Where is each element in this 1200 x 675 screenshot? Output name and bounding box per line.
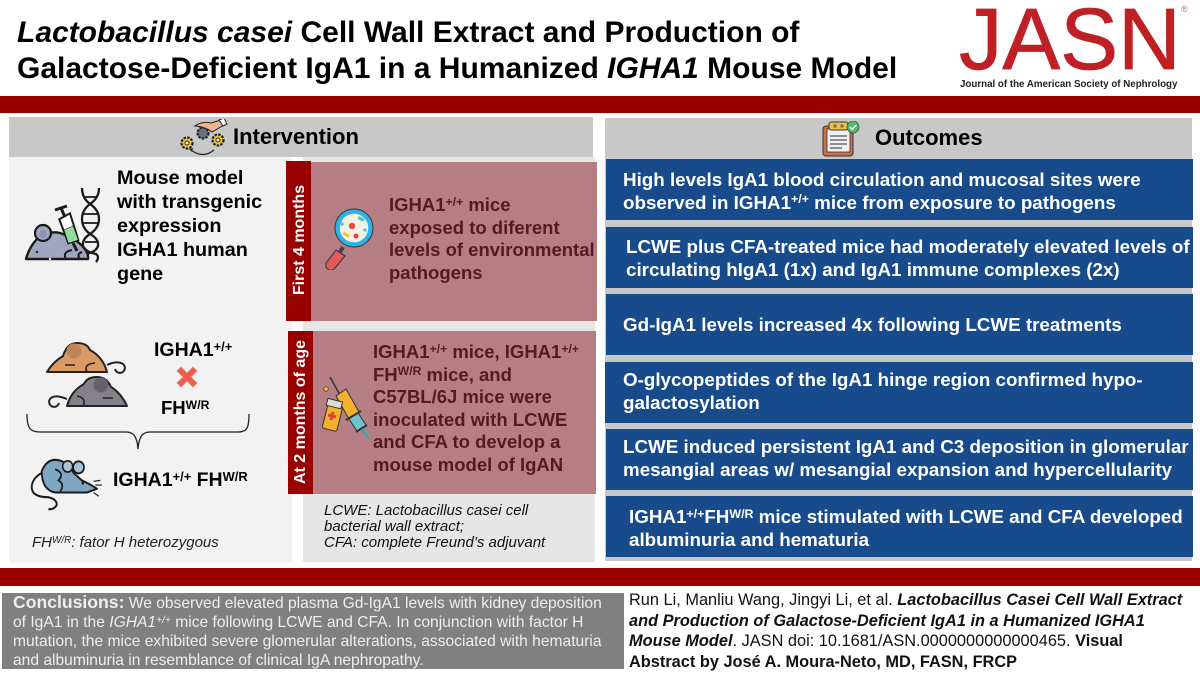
title [17,16,897,85]
text: inoculation: inoculated with LCWE [373,409,567,430]
text: mouse model: with transgenic [117,191,262,213]
title: Galactose-Deficient IgA1 in a Humanized IGHA1 Mouse Model [17,52,897,85]
conclusions text [13,592,602,669]
icon: magnifier with microbes [325,208,374,270]
pink body [288,331,596,494]
text: inoculation: and CFA to develop a [373,431,560,452]
outcome 4: O-glycopeptides of the IgA1 hinge region confirmed hypo- [623,369,1143,390]
text: cross result: IGHA1+/+ FHW/R [113,469,248,491]
side label [286,161,311,321]
icon: red cross [176,366,198,388]
conclusions text: Conclusions: We observed elevated plasma Gd-IgA1 levels with kidney deposition [13,592,602,612]
outcome 3 [606,294,1193,355]
text: exposure: exposed to diferent [389,217,560,238]
text: FH footnote: FHW/R: fator H heterozygous [32,534,219,551]
intervention heading: Intervention [233,124,359,149]
title: Lactobacillus casei Cell Wall Extract and Production of [17,16,799,49]
outcome 4: galactosylation [623,392,760,413]
brace [26,414,250,449]
at 2 months label: At 2 months of age [292,340,309,484]
citation: Mouse Model. JASN doi: 10.1681/ASN.0000000000000465. Visual [629,632,1123,650]
top red band [0,96,1200,113]
icon: syringe and vial [322,376,370,439]
bottom red band [0,568,1200,586]
text: exposure: levels of environmental [389,239,595,260]
icon: clipboard with check [822,121,860,156]
outcomes background [605,118,1192,561]
panel: outcomes [605,118,1192,561]
text: FH label: FHW/R [161,397,209,418]
JASN logo: ® [1181,4,1188,14]
panel: at 2 months of age [288,331,596,494]
text: abbreviations note [324,502,546,551]
text: mouse model [117,167,262,285]
text: exposure: pathogens [389,262,483,283]
icon: blue mouse [30,458,102,510]
text: mouse model: IGHA1 human [117,239,248,261]
text: inoculation: C57BL/6J mice were [373,386,552,407]
text: exposure: IGHA1+/+ mice [389,194,511,215]
text: inoculation [373,341,579,475]
pink body [311,162,597,321]
conclusions text: mutation, the mice exhibited severe glomerular alterations, associated with hematuria [13,633,602,650]
text: inoculation: mouse model of IgAN [373,454,563,475]
intervention background [9,157,292,563]
text: mouse model: gene [117,263,163,285]
outcome 5 [606,429,1193,490]
citation: Abstract by José A. Moura-Neto, MD, FASN, FRCP [629,653,1017,671]
outcome 2: LCWE plus CFA-treated mice had moderately elevated levels of [626,236,1190,257]
outcome 1 [606,159,1193,220]
outcome 6: albuminuria and hematuria [629,529,869,550]
outcome 1: High levels IgA1 blood circulation and mucosal sites were [623,169,1141,190]
outcome 4 [605,362,1193,423]
outcome 6: IGHA1+/+FHW/R mice stimulated with LCWE and CFA developed [629,506,1183,527]
outcome 2 [606,227,1193,288]
panel: conclusions [2,593,624,669]
text: exposure [389,194,595,283]
outcome 2: circulating hIgA1 (1x) and IgA1 immune complexes (2x) [626,259,1120,280]
text: inoculation: FHW/R mice, and [373,364,512,385]
outcome 1: observed in IGHA1+/+ mice from exposure to pathogens [623,192,1116,213]
note background [303,157,595,562]
first 4 months label: First 4 months [291,185,308,295]
text: inoculation: IGHA1+/+ mice, IGHA1+/+ [373,341,579,362]
citation [629,591,1183,671]
icon: hand and gears [180,119,228,156]
intervention header [9,117,593,157]
outcomes heading: Outcomes [875,125,983,150]
icon: brown and grey mice [46,342,128,408]
JASN logo: Journal of the American Society of Nephrology [960,79,1177,90]
text: mouse model: Mouse model [117,167,243,189]
panel: intervention [9,117,597,563]
text: abbreviations note: bacterial wall extract; [324,518,464,535]
panel: first 4 months [286,161,597,321]
outcome 6 [606,496,1193,557]
conclusions text: of IgA1 in the IGHA1+/+ mice following LCWE and CFA. In conjunction with factor H [13,614,583,631]
outcome 5: LCWE induced persistent IgA1 and C3 deposition in glomerular [623,436,1189,457]
conclusions text: and albuminuria in resemblance of clinical IgA nephropathy. [13,652,424,669]
text: IGHA1 label: IGHA1+/+ [154,339,232,361]
text: abbreviations note: LCWE: Lactobacillus casei cell [324,502,528,519]
side label [288,331,313,494]
citation: and Production of Galactose-Deficient IgA1 in a Humanized IGHA1 [629,612,1145,630]
text: mouse model: expression [117,215,221,237]
citation: Run Li, Manliu Wang, Jingyi Li, et al. Lactobacillus Casei Cell Wall Extract [629,591,1182,609]
icon: mouse with syringe and DNA [24,188,100,263]
outcome 3: Gd-IgA1 levels increased 4x following LCWE treatments [623,314,1122,335]
outcome 5: mesangial areas w/ mesangial expansion and hypercellularity [623,459,1172,480]
text: abbreviations note: CFA: complete Freund’s adjuvant [324,534,545,551]
